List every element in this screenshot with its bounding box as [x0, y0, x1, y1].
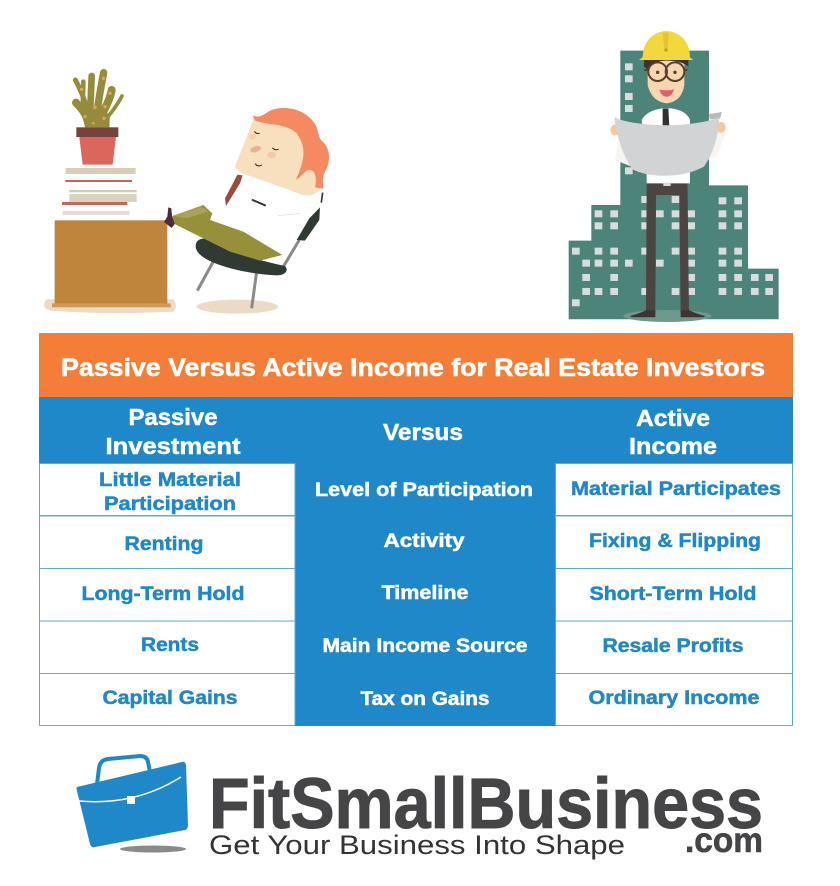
column headings: Versus [383, 419, 463, 445]
column headings: Active [636, 405, 710, 431]
passive column text: Renting [124, 534, 204, 555]
icon: stack of books [62, 168, 137, 215]
title banner: Passive Versus Active Income for Real Estate Investors [61, 354, 765, 382]
icon: potted plant [75, 73, 122, 165]
column: passive investment cells [40, 464, 295, 726]
column headings: Income [629, 433, 717, 459]
icon: briefcase [76, 756, 188, 852]
versus column text: Tax on Gains [360, 689, 490, 710]
icon: builder [610, 31, 727, 317]
active column text: Resale Profits [602, 636, 744, 657]
versus column text: Activity [384, 531, 465, 552]
icon: desk [52, 220, 171, 307]
versus column text: Level of Participation [315, 480, 533, 501]
versus column text: Main Income Source [322, 636, 528, 657]
tagline: Get Your Business Into Shape [209, 830, 625, 860]
column headings: Passive [128, 404, 218, 430]
illustration: relaxed man at desk [44, 73, 329, 314]
comparison table [39, 333, 793, 726]
column: active income cells [556, 464, 792, 726]
passive column text: Little Material [99, 470, 241, 491]
wordmark suffix: .com [685, 821, 763, 860]
column headings: Investment [106, 433, 241, 459]
passive column text: Participation [104, 494, 236, 515]
active column text: Short-Term Hold [590, 584, 756, 605]
active column text: Fixing & Flipping [589, 531, 761, 552]
icon: chair [196, 239, 299, 308]
icon: city buildings [569, 51, 779, 322]
icon: man [164, 108, 329, 261]
logo: Fit Small Business [76, 756, 763, 860]
versus column text: Timeline [382, 583, 468, 604]
title banner [39, 333, 793, 397]
illustration: builder with blueprint and city [569, 31, 779, 322]
passive column text: Capital Gains [102, 688, 238, 709]
active column text: Material Participates [571, 479, 781, 500]
active column text [571, 479, 781, 709]
versus column text [315, 480, 533, 710]
table body background [39, 397, 793, 726]
passive column text [82, 470, 244, 709]
column headings [106, 404, 717, 459]
wordmark: FitSmallBusiness [209, 765, 763, 844]
passive column text: Long-Term Hold [82, 584, 244, 605]
active column text: Ordinary Income [588, 688, 760, 709]
passive column text: Rents [141, 635, 199, 656]
floor shadows [44, 299, 278, 314]
